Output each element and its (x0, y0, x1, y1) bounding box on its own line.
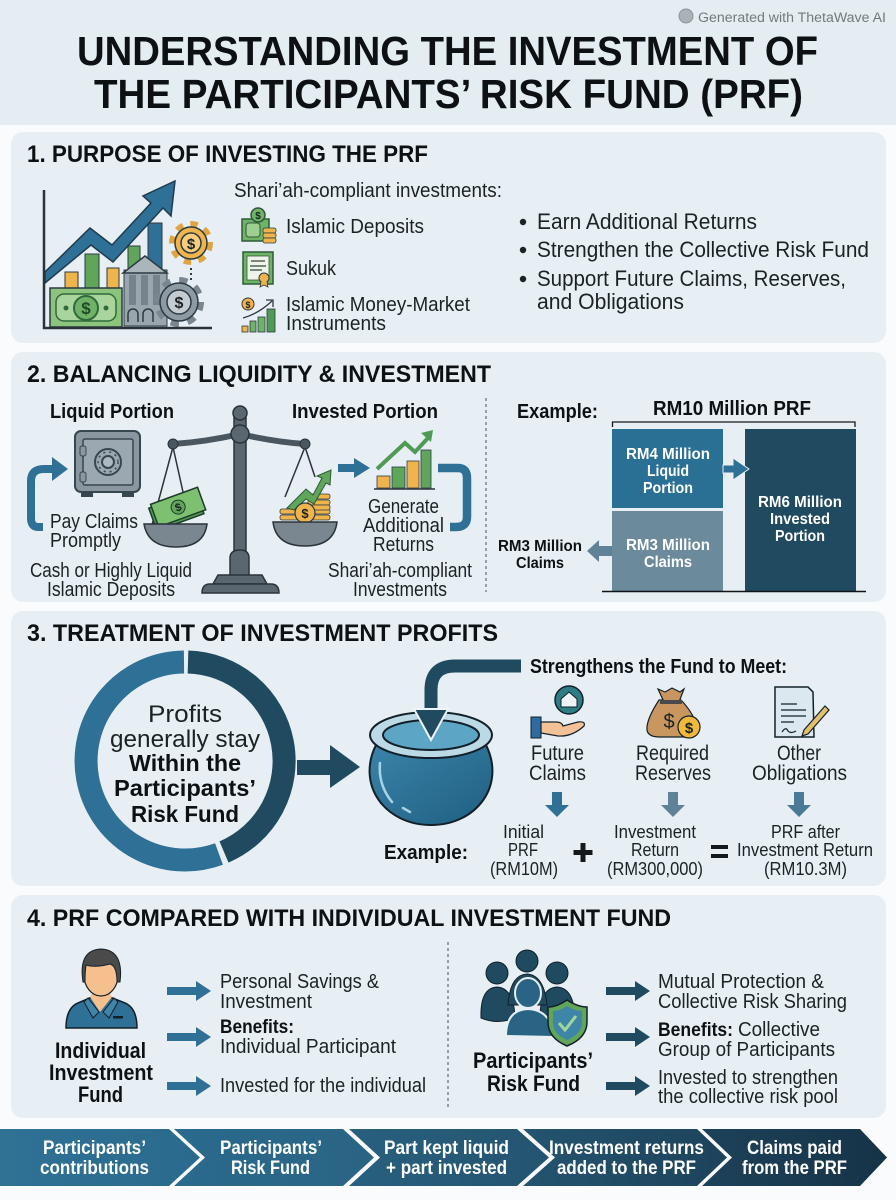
label: generate additional returns: Generate (368, 496, 439, 518)
step: participants' risk fund: Risk Fund (231, 1158, 310, 1179)
label: example: Example: (384, 842, 468, 864)
label: pay claims promptly: Promptly (50, 530, 121, 552)
money on left pan: $ (174, 501, 183, 515)
label: cash or highly liquid islamic deposits: Islamic Deposits (47, 579, 175, 601)
process flow chevrons (0, 1129, 887, 1186)
column: required reserves (635, 688, 711, 817)
step: participants' contributions: contributions (40, 1158, 149, 1179)
column: other obligations: Other (777, 742, 821, 765)
icon: growth chart with cash, bank and gears: $ (81, 299, 91, 318)
column: future claims: Future (531, 742, 584, 765)
label: generate additional returns: Returns (373, 534, 434, 556)
text: investment return: Return (631, 840, 679, 860)
text: personal savings: Investment (220, 991, 312, 1013)
text: benefits collective: Collective (738, 1019, 820, 1041)
bullet list: purposes: Earn Additional Returns (537, 209, 757, 234)
step: investment returns added to the PRF: added to the PRF (557, 1158, 696, 1179)
label: RM3 million claims: Claims (516, 555, 564, 572)
icon: returns bar chart (374, 430, 435, 489)
chart: profits ring (86, 662, 284, 860)
icon: money bag: $ (685, 720, 694, 737)
example formula (384, 822, 873, 879)
symbol: plus (574, 843, 592, 862)
text: investment return: (RM300,000) (607, 859, 703, 879)
symbol: equals (711, 845, 728, 858)
step: participants' risk fund: Participants’ (220, 1138, 322, 1159)
arrow: down (787, 792, 811, 817)
icon: balance scale: $ (301, 506, 309, 521)
label: generate additional returns (363, 496, 444, 556)
icon: growth chart with cash, bank and gears: $ (187, 236, 196, 253)
column: future claims: Claims (529, 762, 586, 785)
text: investment return (607, 822, 703, 879)
icon: balance scale (144, 406, 337, 593)
icon: islamic deposits (242, 208, 276, 243)
block: RM3 million claims: Claims (644, 554, 692, 571)
panel: 1. purpose of investing the PRF (11, 132, 886, 343)
column: future claims (529, 686, 586, 817)
panel: 4. PRF compared with individual investment fund (11, 895, 886, 1118)
money on left pan (148, 487, 207, 531)
text: personal savings (220, 971, 380, 1013)
text: benefits collective (658, 1019, 835, 1061)
label: cash or highly liquid islamic deposits: Cash or Highly Liquid (30, 560, 192, 582)
heading: RM10 million PRF: RM10 Million PRF (653, 398, 811, 420)
step: participants' contributions: Participants’ (43, 1138, 146, 1159)
icon: safe (75, 431, 140, 497)
text: PRF after investment return: Investment Return (737, 840, 873, 860)
arrow: loop to safe (31, 457, 68, 527)
arrow: loop from returns (438, 468, 467, 527)
label: islamic deposits: Islamic Deposits (286, 216, 424, 238)
block: RM6 million invested portion: Invested (770, 511, 830, 528)
text: PRF after investment return: PRF after (771, 822, 840, 842)
title: THE PARTICIPANTS’ RISK FUND (PRF) (94, 71, 803, 117)
panel: 3. treatment of investment profits (11, 611, 886, 886)
arrow: down (545, 792, 569, 817)
step: participants' risk fund (174, 1129, 374, 1186)
label: shari'ah-compliant investments: Investments (353, 579, 447, 601)
icon: money bag (647, 688, 700, 738)
text: benefits collective: Benefits: (658, 1020, 733, 1041)
panel: 2. balancing liquidity and investment (11, 352, 886, 602)
text: mutual protection: Mutual Protection & (658, 971, 825, 993)
icon: hand with house (531, 686, 584, 738)
step: part kept liquid + part invested: + part invested (386, 1158, 507, 1179)
step: investment returns added to the PRF: Investment returns (549, 1138, 704, 1159)
text: profits statement (110, 701, 260, 827)
text: benefits collective: Group of Participants (658, 1039, 835, 1061)
arrow: ring to pot (297, 745, 360, 788)
icon: growth chart with cash, bank and gears: $ (175, 295, 184, 312)
arrow: strengthens fund into pot (414, 666, 521, 740)
arrow: liquid to invested (723, 458, 749, 480)
watermark: Generated with ThetaWave AI (698, 10, 886, 25)
text: profits statement: generally stay (110, 726, 260, 753)
step: part kept liquid + part invested: Part kept liquid (384, 1138, 509, 1159)
label: participants' risk fund: Risk Fund (487, 1071, 580, 1096)
label: pay claims promptly: Pay Claims (50, 511, 138, 533)
block: RM6 million invested portion (745, 429, 856, 591)
bullet list: purposes (520, 209, 869, 314)
icon: money-market instruments: $ (245, 300, 251, 310)
block: RM3 million claims (612, 511, 723, 591)
label: sukuk: Sukuk (286, 258, 337, 280)
heading: section 1: 1. PURPOSE OF INVESTING THE PRF (27, 141, 428, 168)
label: money-market instruments: Instruments (286, 313, 386, 335)
icon: individual person (66, 949, 137, 1028)
bullet list: purposes: Support Future Claims, Reserves, (537, 266, 846, 291)
text: initial PRF (490, 822, 558, 879)
label: individual investment fund: Individual (55, 1038, 146, 1063)
bullet list: purposes: and Obligations (537, 289, 684, 314)
text: PRF after investment return: (RM10.3M) (764, 859, 847, 879)
icon: money-market instruments (242, 298, 275, 332)
arrows: PRF rows (606, 981, 650, 1096)
text: initial PRF: Initial (503, 822, 544, 842)
label: cash or highly liquid islamic deposits (30, 560, 192, 601)
stacked chart: RM10 million split (602, 429, 866, 592)
text: benefits individual: Benefits: (220, 1017, 294, 1038)
label: individual investment fund (49, 1038, 154, 1107)
column: other obligations: Obligations (752, 762, 847, 785)
block: RM4 million liquid portion: RM4 Million (626, 446, 710, 463)
column: required reserves: Reserves (635, 762, 711, 785)
label: pay claims promptly (50, 511, 138, 552)
label: money-market instruments: Islamic Money-Market (286, 294, 470, 316)
heading: section 3: 3. TREATMENT OF INVESTMENT PROFITS (27, 620, 498, 647)
title: UNDERSTANDING THE INVESTMENT OF (77, 28, 818, 74)
label: participants' risk fund (473, 1048, 593, 1096)
icon: islamic deposits: $ (255, 211, 261, 222)
block: RM4 million liquid portion: Portion (643, 480, 693, 497)
label: shari'ah-compliant investments: Shari’ah-compliant (328, 560, 472, 582)
column: required reserves: Required (636, 742, 709, 765)
text: profits statement: Participants’ (114, 775, 256, 801)
icon: sukuk certificate (243, 252, 273, 287)
step: claims paid from the PRF: from the PRF (742, 1158, 847, 1179)
arrow: down (661, 792, 685, 817)
arrow: invested to returns (338, 458, 370, 478)
title (77, 28, 818, 117)
label: money-market instruments (286, 294, 470, 335)
label: RM3 million claims (498, 538, 582, 572)
bullet list: purposes: Strengthen the Collective Risk Fund (537, 237, 869, 262)
text: invested for the individual: Invested for the individual (220, 1075, 426, 1097)
label: individual investment fund: Fund (78, 1082, 123, 1107)
block: RM6 million invested portion: RM6 Million (758, 494, 842, 511)
text: initial PRF: PRF (508, 840, 538, 860)
text: personal savings: Personal Savings & (220, 971, 380, 993)
label: individual investment fund: Investment (49, 1060, 154, 1085)
label: shari'ah-compliant investments (328, 560, 472, 601)
text: invested to strengthen: the collective risk pool (658, 1086, 838, 1108)
heading: invested portion: Invested Portion (292, 401, 438, 423)
block: RM4 million liquid portion: Liquid (647, 463, 689, 480)
heading: liquid portion: Liquid Portion (50, 401, 174, 423)
heading: section 4: 4. PRF COMPARED WITH INDIVIDUAL INVESTMENT FUND (27, 905, 671, 932)
column: other obligations (752, 687, 847, 817)
block: RM4 million liquid portion (612, 429, 723, 508)
step: claims paid from the PRF (702, 1129, 887, 1186)
text: mutual protection: Collective Risk Sharing (658, 991, 847, 1013)
label: participants' risk fund: Participants’ (473, 1048, 593, 1073)
text: PRF after investment return (737, 822, 873, 879)
block: RM3 million claims: RM3 Million (626, 537, 710, 554)
text: profits statement: Profits (148, 701, 222, 728)
text: profits statement: Risk Fund (131, 801, 239, 827)
label: generate additional returns: Additional (363, 515, 444, 537)
text: shari'ah-compliant investments: Shari’ah-compliant investments: (234, 180, 502, 202)
heading: strengthens the fund to meet: Strengthens the Fund to Meet: (530, 656, 787, 678)
heading: example: Example: (517, 401, 598, 423)
text: invested to strengthen: Invested to strengthen (658, 1067, 838, 1089)
label: RM3 million claims: RM3 Million (498, 538, 582, 555)
block: RM6 million invested portion: Portion (775, 528, 825, 545)
text: benefits individual (220, 1017, 396, 1058)
text: initial PRF: (RM10M) (490, 859, 558, 879)
text: benefits individual: Individual Participant (220, 1036, 396, 1058)
icon: growth chart with cash, bank and gears (44, 181, 212, 328)
step: claims paid from the PRF: Claims paid (747, 1138, 842, 1159)
arrows: individual rows (167, 981, 211, 1096)
text: profits statement: Within the (129, 750, 241, 776)
step: participants' contributions (0, 1129, 200, 1186)
icon: document and pen (775, 687, 829, 737)
icon: money bag: $ (663, 711, 675, 733)
coins and arrow on right pan (280, 494, 330, 520)
text: mutual protection (658, 971, 847, 1013)
text: invested to strengthen (658, 1067, 838, 1108)
step: part kept liquid + part invested (349, 1129, 549, 1186)
arrow: claims paid out (587, 540, 612, 562)
text: investment return: Investment (614, 822, 696, 842)
heading: section 2: 2. BALANCING LIQUIDITY & INVESTMENT (27, 361, 491, 388)
step: investment returns added to the PRF (523, 1129, 727, 1186)
icon: pot (370, 712, 492, 825)
icon: group with shield (481, 950, 587, 1046)
